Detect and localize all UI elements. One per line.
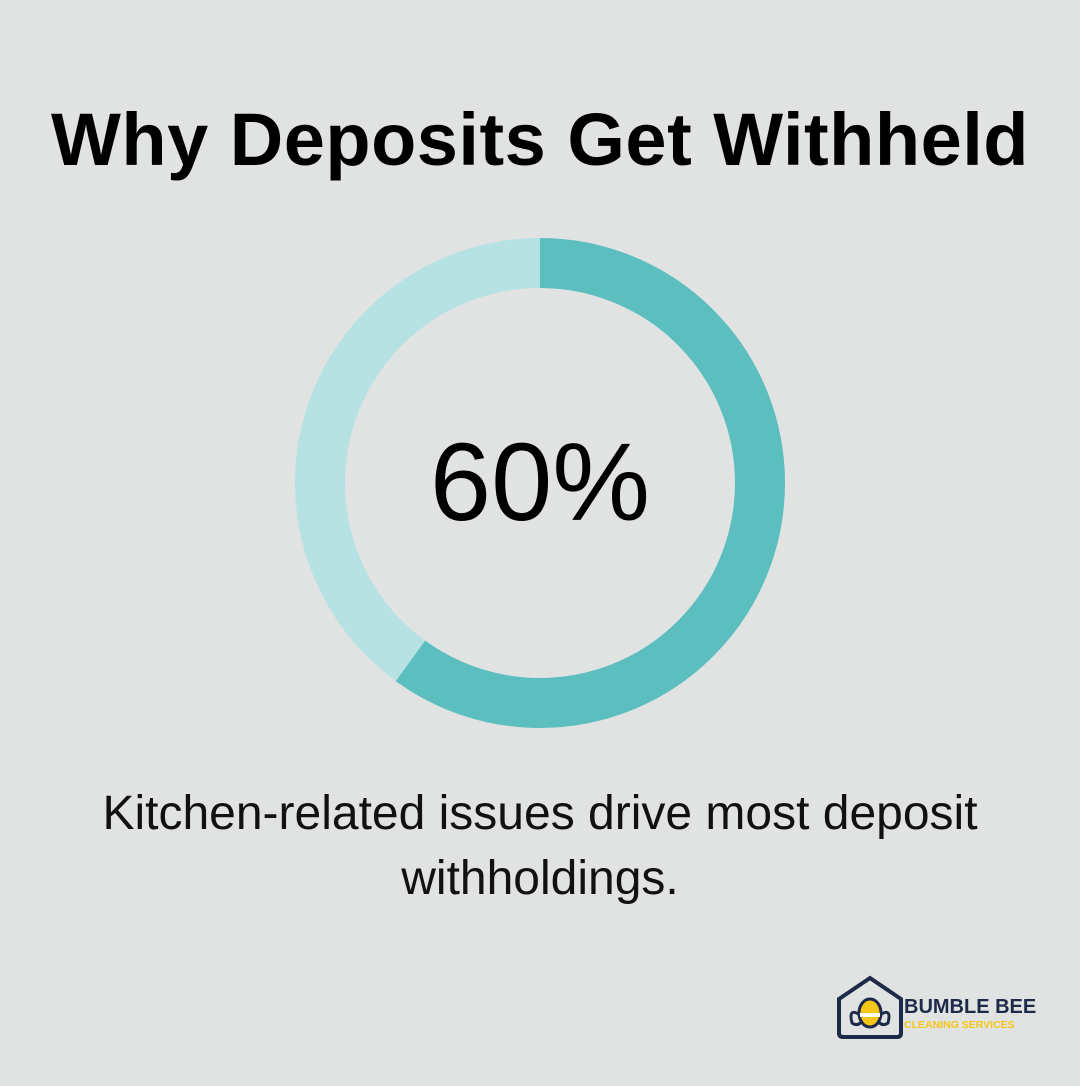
icon: bee house [837,976,903,1039]
percentage value: 60% [430,421,650,544]
title: Why Deposits Get Withheld [51,98,1029,181]
caption [102,787,978,905]
caption: withholdings. [401,852,679,905]
caption: Kitchen-related issues drive most deposit [102,787,978,840]
logo [837,976,1036,1039]
brand name: BUMBLE BEE [904,996,1036,1018]
logo: CLEANING SERVICES [904,1019,1015,1031]
